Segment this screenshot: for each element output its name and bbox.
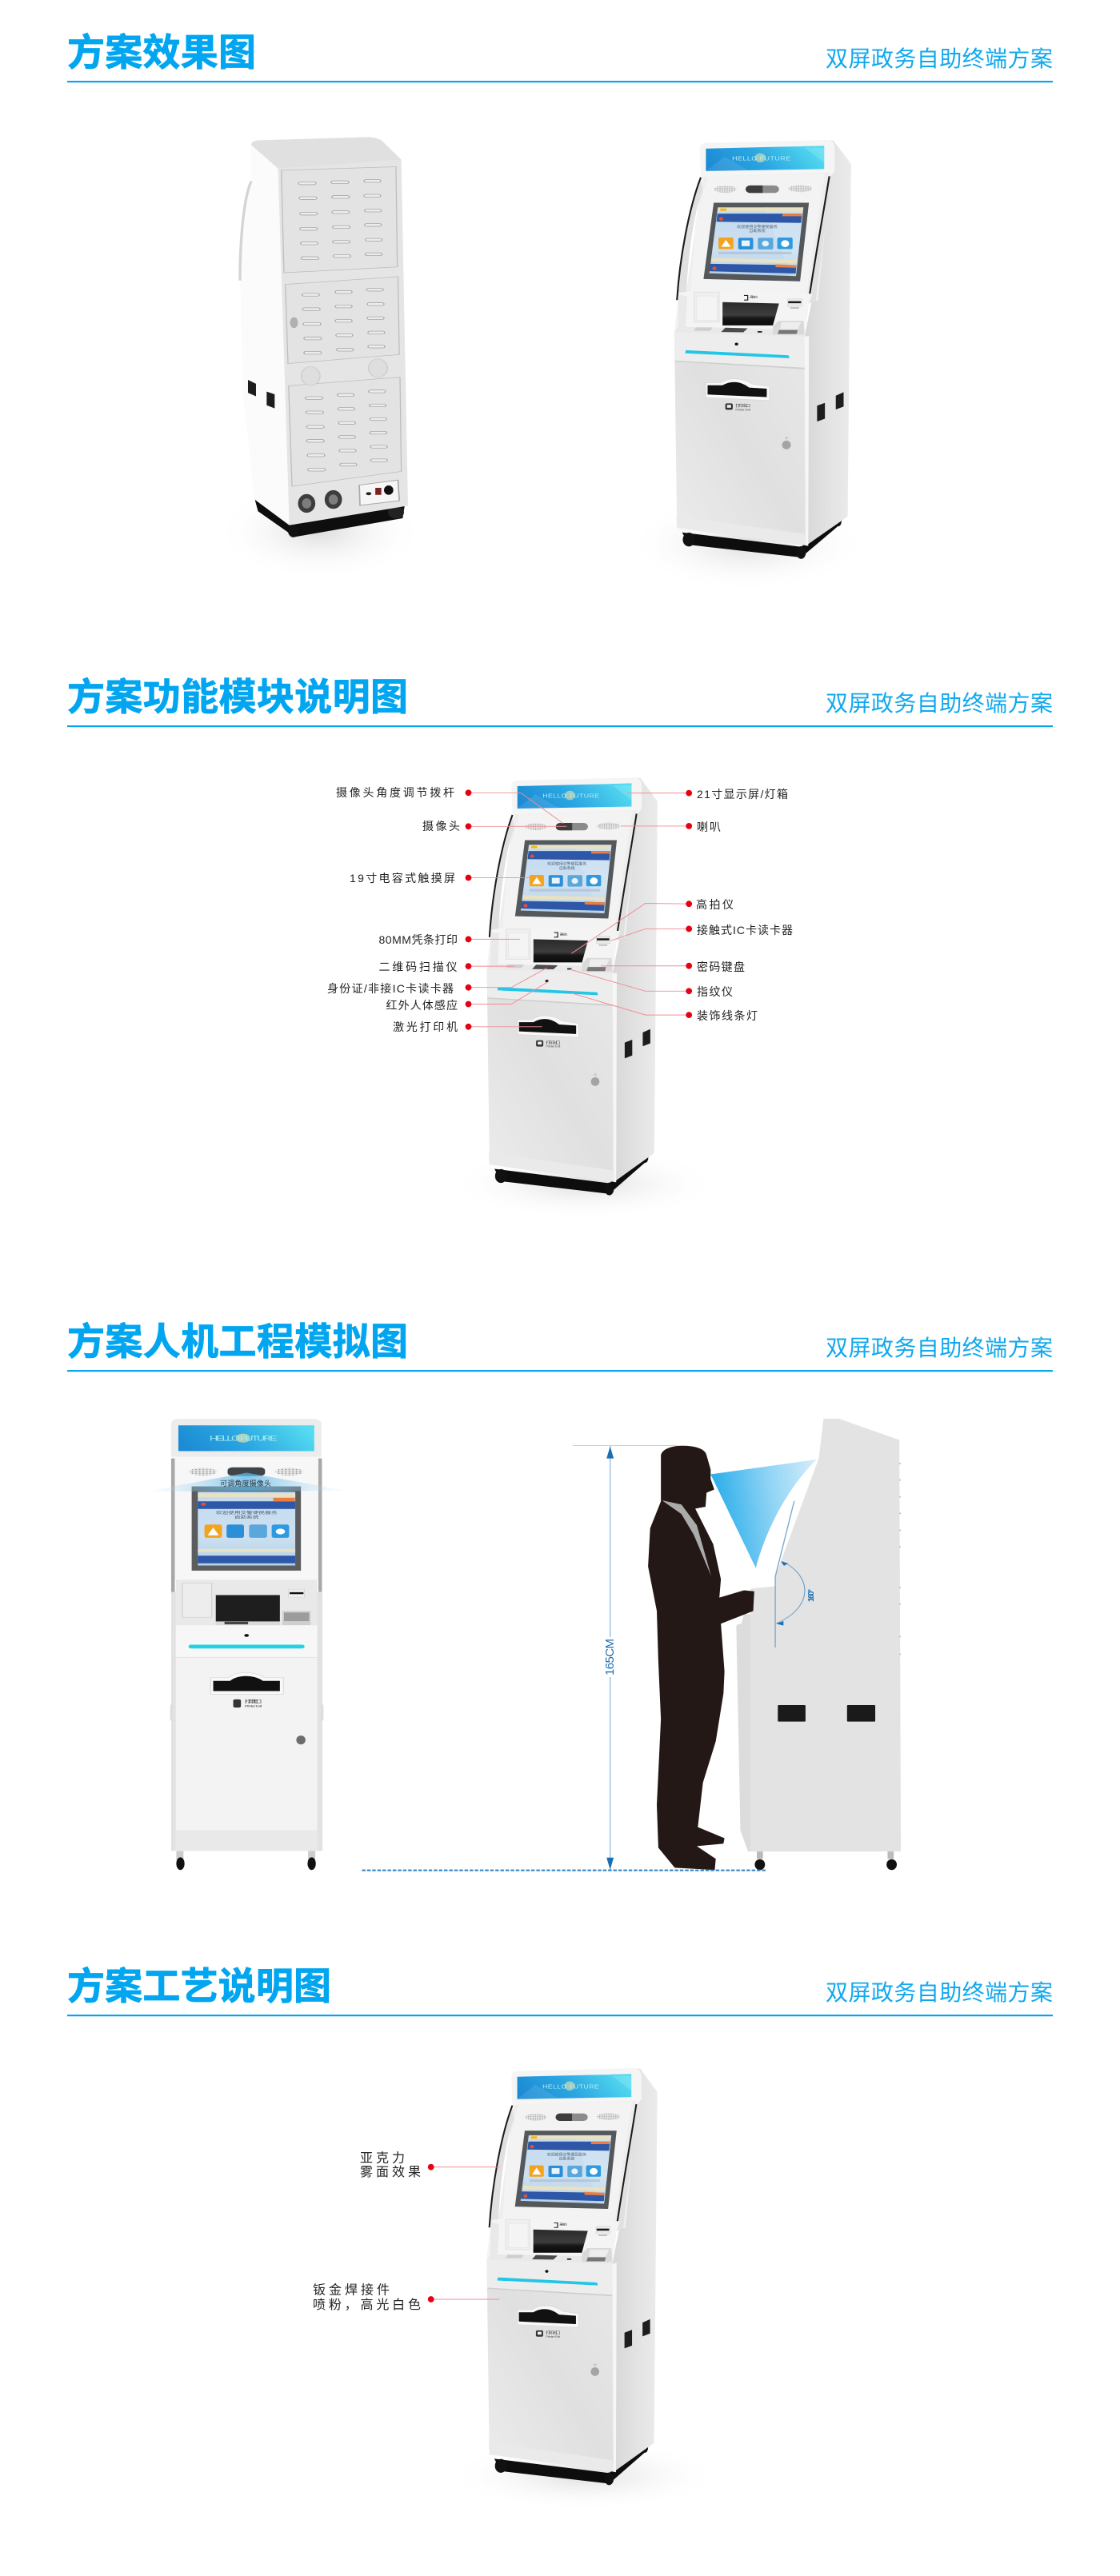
text: section 4 subtitle: 双屏政务自助终端方案	[826, 1980, 1053, 2005]
callout lines	[469, 793, 689, 1027]
icon: kiosk annotated	[487, 777, 658, 1196]
panel: section 1 effect drawings	[67, 31, 1053, 592]
icon: flat front kiosk: 打印出口	[245, 1699, 262, 1705]
callout dots	[466, 789, 692, 1030]
icon: flat front kiosk: 自助系统	[234, 1514, 259, 1520]
icon: flat front kiosk: HELLO FUTURE	[210, 1435, 278, 1443]
text: camera caption: 可调角度摄像头	[220, 1478, 271, 1488]
heading: section 4 title: 方案工艺说明图	[67, 1965, 331, 2007]
labels: left callouts: 红外人体感应	[386, 999, 458, 1012]
icon: side kiosk	[736, 1419, 901, 1870]
labels: left callouts: 摄像头	[422, 820, 460, 833]
callout: welded sheet metal	[313, 2282, 499, 2312]
callout: welded sheet metal: 钣金焊接件	[313, 2282, 390, 2297]
text: section 3 subtitle: 双屏政务自助终端方案	[826, 1336, 1053, 1360]
icon: kiosk with craft notes	[486, 2068, 658, 2485]
callout: acrylic matte: 亚克力	[360, 2151, 405, 2166]
panel: section 3 ergonomics simulation	[67, 1320, 1053, 1871]
labels: left callouts: 二维码扫描仪	[379, 961, 458, 973]
icon: front kiosk view	[674, 140, 851, 559]
labels: left callouts	[327, 786, 460, 1033]
text: section 2 subtitle: 双屏政务自助终端方案	[826, 691, 1053, 716]
labels: left callouts: 19寸电容式触摸屏	[350, 872, 455, 885]
labels: right callouts: 指纹仪	[697, 985, 733, 998]
panel: section 2 function modules	[67, 676, 1053, 1220]
icon: kiosk shadow and back view	[216, 137, 868, 592]
text: section 1 subtitle: 双屏政务自助终端方案	[826, 46, 1053, 71]
labels: right callouts: 装饰线条灯	[697, 1009, 758, 1022]
icon: blue sight cone	[710, 1460, 817, 1568]
callout: acrylic matte: 雾面效果	[360, 2165, 421, 2179]
dimension lines	[362, 1446, 805, 1871]
panel: section 4 craft description	[67, 1965, 1053, 2511]
labels: left callouts: 身份证/非接IC卡读卡器	[327, 982, 454, 995]
callout: welded sheet metal: 喷粉，高光白色	[313, 2298, 421, 2312]
labels: right callouts	[696, 788, 793, 1022]
labels: left callouts: 80MM凭条打印	[379, 933, 458, 946]
labels: right callouts: 21寸显示屏/灯箱	[697, 788, 788, 801]
text: height dimension: 165CM	[603, 1639, 617, 1675]
labels: right callouts: 高拍仪	[696, 898, 734, 911]
chart: height dimension and side view	[362, 1419, 901, 1871]
icon: camera viewing fan	[144, 1472, 349, 1492]
heading: section 1 title: 方案效果图	[67, 31, 256, 74]
text: angle dimension: 160°	[807, 1589, 816, 1602]
heading: section 2 title: 方案功能模块说明图	[67, 676, 408, 718]
callout: acrylic matte	[360, 2151, 499, 2179]
labels: left callouts: 激光打印机	[393, 1020, 458, 1033]
icon: flat front kiosk	[144, 1419, 349, 1870]
icon: flat front kiosk: 欢迎使用交警便民服务	[216, 1510, 278, 1516]
labels: right callouts: 密码键盘	[697, 961, 745, 973]
labels: right callouts: 接触式IC卡读卡器	[697, 924, 793, 937]
icon: flat front kiosk: Printer Exit	[245, 1705, 262, 1708]
labels: right callouts: 喇叭	[697, 821, 721, 833]
heading: section 3 title: 方案人机工程模拟图	[67, 1320, 408, 1363]
labels: left callouts: 摄像头角度调节拨杆	[336, 786, 454, 799]
icon: human silhouette	[648, 1446, 754, 1870]
